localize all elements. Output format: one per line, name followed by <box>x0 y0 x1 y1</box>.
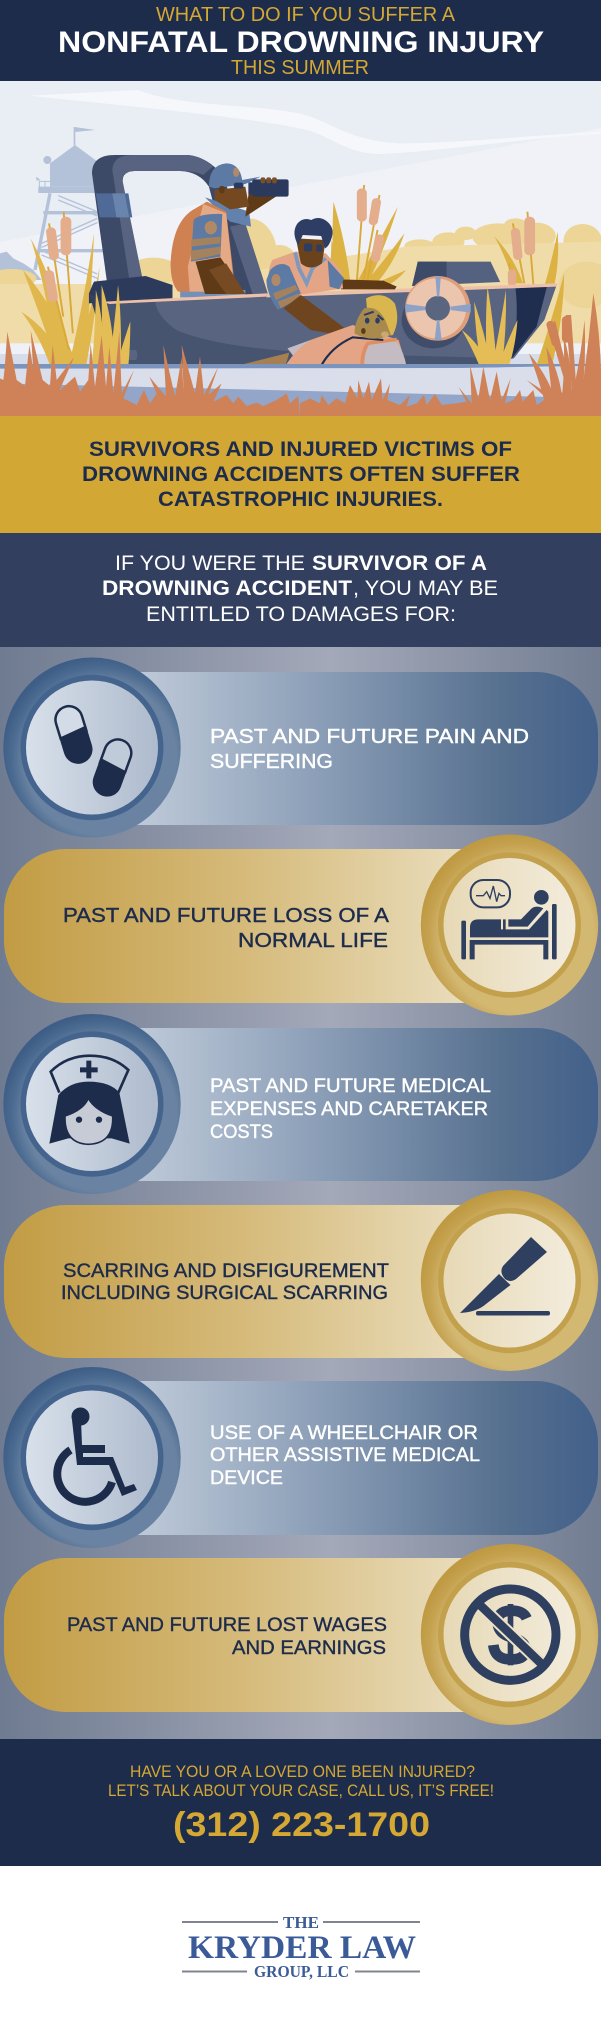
title line 2: NONFATAL DROWNING INJURY <box>58 26 544 59</box>
item text: PAST AND FUTURE LOST WAGES <box>67 1614 387 1636</box>
rear reeds and cattails <box>330 202 564 365</box>
item: wheelchair: DEVICE <box>210 1467 283 1489</box>
title line 3: THIS SUMMER <box>231 56 369 79</box>
front reeds <box>92 285 517 365</box>
statement bold 1: SURVIVOR OF A <box>312 551 487 575</box>
logo: The Kryder Law Group: THE <box>283 1913 319 1932</box>
statement bold 2: DROWNING ACCIDENT <box>102 576 352 600</box>
item text: PAST AND FUTURE PAIN AND <box>210 726 529 748</box>
hull of boat <box>89 262 557 366</box>
statement line 3: ENTITLED TO DAMAGES FOR: <box>146 602 456 626</box>
item: loss of normal life <box>4 834 598 1016</box>
item: loss of normal life: NORMAL LIFE <box>238 930 388 952</box>
item: wheelchair: OTHER ASSISTIVE MEDICAL <box>210 1444 480 1466</box>
title line 1: WHAT TO DO IF YOU SUFFER A <box>156 3 455 26</box>
item: pain and suffering: SUFFERING <box>210 751 333 773</box>
logo: The Kryder Law Group: GROUP, LLC <box>254 1962 349 1981</box>
boat arch frame <box>92 155 268 298</box>
item: lost wages: AND EARNINGS <box>232 1637 386 1659</box>
cta line 2: LET’S TALK ABOUT YOUR CASE, CALL US, IT’S FREE! <box>108 1781 494 1800</box>
life ring <box>402 276 471 348</box>
item text: PAST AND FUTURE MEDICAL <box>210 1075 491 1097</box>
watch tower <box>0 127 107 280</box>
illustration: rescue boat scene <box>0 81 601 418</box>
panel: call to action <box>0 1739 601 1866</box>
item text: USE OF A WHEELCHAIR OR <box>210 1422 478 1444</box>
icon: no money <box>465 1589 556 1680</box>
logo: The Kryder Law Group: KRYDER LAW <box>188 1930 416 1966</box>
item: pain and suffering <box>3 658 598 838</box>
item text: SCARRING AND DISFIGUREMENT <box>63 1260 389 1282</box>
icon: scalpel <box>460 1237 550 1316</box>
icon: wheelchair <box>57 1408 137 1502</box>
phone number: (312) 223-1700 <box>173 1806 430 1844</box>
banner: catastrophic injuries <box>0 416 601 533</box>
left reed clump <box>21 233 100 365</box>
item: medical expenses <box>3 1014 598 1194</box>
rescuer with binoculars <box>171 163 289 297</box>
water band <box>0 364 601 369</box>
banner line 3: CATASTROPHIC INJURIES. <box>158 487 443 511</box>
hills and field <box>0 218 601 288</box>
statement line 1: IF YOU WERE THE <box>115 551 305 575</box>
cta line 1: HAVE YOU OR A LOVED ONE BEEN INJURED? <box>130 1762 475 1781</box>
statement line 2: , YOU MAY BE <box>353 576 498 600</box>
logo: The Kryder Law Group <box>0 1866 601 2025</box>
icon: capsules <box>51 703 136 801</box>
foreground right cattails and reeds <box>529 293 601 400</box>
panel: survivor statement <box>0 533 601 647</box>
icon: nurse <box>49 1056 130 1144</box>
second rescuer <box>266 218 397 335</box>
item: scarring: INCLUDING SURGICAL SCARRING <box>61 1282 388 1304</box>
item: lost wages <box>4 1544 598 1725</box>
foreground grass right <box>300 365 601 417</box>
panel: damages list background <box>0 647 601 1739</box>
banner line 1: SURVIVORS AND INJURED VICTIMS OF <box>89 437 512 461</box>
item: wheelchair <box>3 1367 598 1548</box>
title banner <box>0 0 601 81</box>
item text: PAST AND FUTURE LOSS OF A <box>63 905 390 927</box>
item: medical expenses: EXPENSES AND CARETAKER <box>210 1098 488 1120</box>
foreground grass left <box>0 331 300 417</box>
banner line 2: DROWNING ACCIDENTS OFTEN SUFFER <box>82 462 520 486</box>
item: medical expenses: COSTS <box>210 1121 273 1143</box>
icon: hospital bed <box>461 880 557 959</box>
drowning victim <box>238 295 406 366</box>
item: scarring <box>4 1190 598 1371</box>
